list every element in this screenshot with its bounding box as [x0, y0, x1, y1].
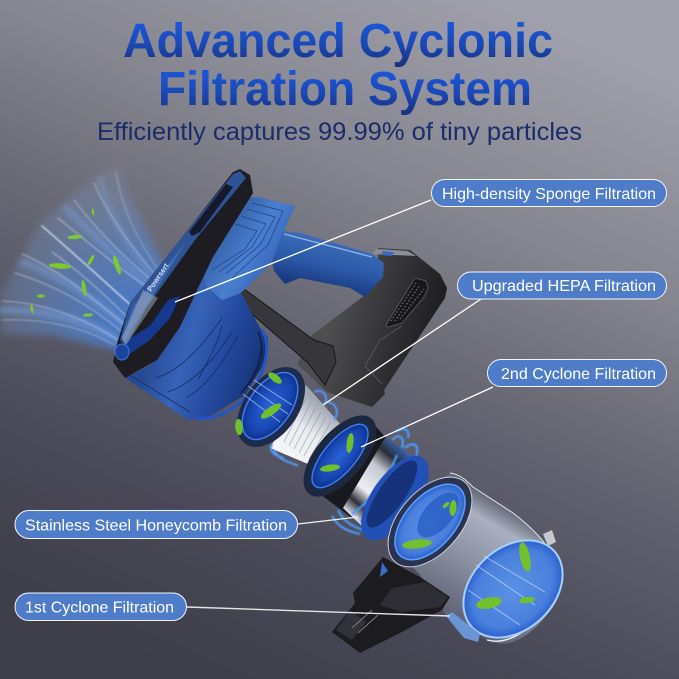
leader line: sponge	[175, 200, 431, 302]
label: 2nd Cyclone Filtration: 2nd Cyclone Filtration	[501, 366, 656, 383]
blue ring	[348, 445, 442, 551]
label: High-density Sponge Filtration: High-density Sponge Filtration	[442, 186, 656, 203]
subtitle: Efficiently captures 99.99% of tiny particles	[97, 118, 582, 146]
label: Upgraded HEPA Filtration	[458, 272, 666, 299]
brand text: Powrsert	[145, 261, 171, 293]
title: Filtration System	[158, 63, 532, 116]
handle	[272, 231, 384, 297]
airflow streams with leaves	[0, 165, 165, 350]
leader line: 1st cyclone	[187, 607, 450, 616]
steel mesh section	[343, 438, 424, 532]
top blue strip	[120, 171, 246, 346]
label: Stainless Steel Honeycomb Filtration: Stainless Steel Honeycomb Filtration	[25, 518, 287, 534]
transparent dust cup	[332, 462, 582, 657]
leader line: 2nd cyclone	[361, 387, 493, 447]
title	[123, 15, 553, 116]
leader line: honeycomb	[298, 517, 358, 524]
icon: battery grille	[386, 278, 428, 327]
blue grille band	[118, 296, 180, 358]
label: Upgraded HEPA Filtration: Upgraded HEPA Filtration	[472, 278, 656, 295]
label: 1st Cyclone Filtration	[15, 593, 186, 620]
front ring	[372, 462, 488, 582]
lower frame arm	[237, 289, 336, 385]
label: Stainless Steel Honeycomb Filtration	[15, 510, 298, 538]
second cyclone filter	[290, 403, 442, 551]
HEPA filter	[223, 355, 342, 466]
label: 1st Cyclone Filtration: 1st Cyclone Filtration	[25, 600, 174, 616]
icon: leaves	[30, 208, 122, 317]
main vacuum body	[113, 169, 295, 420]
dust cup latch	[446, 612, 480, 642]
rear glass face	[444, 521, 582, 657]
battery pack	[297, 248, 447, 407]
body cylinder and grip	[125, 197, 295, 420]
icon: leaves	[235, 370, 284, 435]
black section	[312, 422, 392, 518]
label: High-density Sponge Filtration	[432, 180, 666, 206]
label: 2nd Cyclone Filtration	[488, 360, 666, 386]
leader line: HEPA	[323, 299, 481, 405]
black head band	[113, 169, 253, 378]
icon: leaves	[402, 500, 535, 611]
icon: leaves	[320, 433, 355, 473]
title: Advanced Cyclonic	[123, 15, 553, 68]
dust cup base	[332, 557, 450, 653]
